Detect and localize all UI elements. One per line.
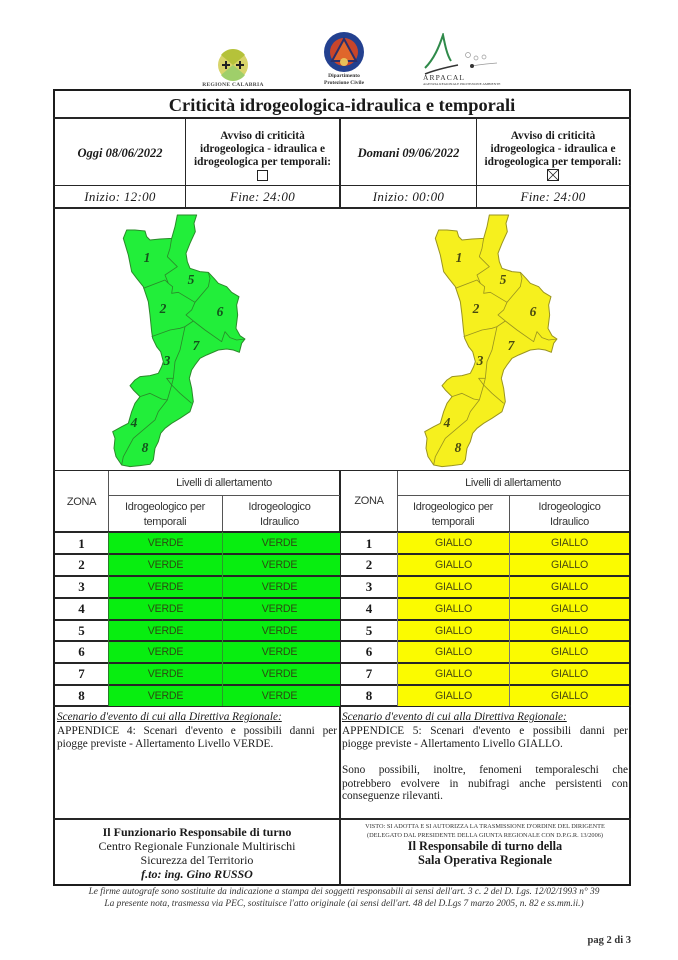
table: today alert levels: VERDE [148, 581, 183, 593]
tomorrow warning notice [484, 130, 622, 181]
table: today alert levels: ZONA [67, 496, 96, 508]
table: tomorrow alert levels: GIALLO [435, 668, 472, 680]
table: today alert levels: 7 [78, 666, 85, 681]
logo: ARPACAL [423, 33, 500, 86]
table: tomorrow alert levels: Idrogeologico per [413, 501, 493, 513]
table: tomorrow alert levels: GIALLO [551, 625, 588, 637]
table: today alert levels: VERDE [148, 603, 183, 615]
map: tomorrow zones, yellow: 8 [455, 440, 462, 455]
signature: operations room: (DELEGATO DAL PRESIDENTE DELLA GIUNTA REGIONALE CON D.P.G.R. 13/2006) [367, 832, 603, 838]
table: tomorrow alert levels: Livelli di allertamento [465, 477, 561, 489]
map: today zones, green: 2 [159, 301, 167, 316]
signature: duty officer: Sicurezza del Territorio [141, 853, 253, 867]
map: today zones, green: 3 [163, 353, 171, 368]
table: tomorrow alert levels [341, 471, 629, 706]
signature: duty officer [99, 825, 296, 881]
table: tomorrow alert levels: GIALLO [551, 646, 588, 658]
signature: duty officer: Centro Regionale Funzionale Multirischi [99, 839, 295, 853]
table: tomorrow alert levels: Idrogeologico [538, 501, 601, 513]
table: tomorrow alert levels: GIALLO [435, 537, 472, 549]
table: today alert levels: VERDE [262, 581, 297, 593]
today end time: Fine: 24:00 [230, 189, 295, 204]
table: tomorrow alert levels: GIALLO [435, 625, 472, 637]
table: today alert levels: VERDE [262, 625, 297, 637]
today warning notice: idrogeologica per temporali: [194, 156, 331, 168]
logo: ARPACAL: ARPACAL [423, 73, 465, 82]
table: tomorrow alert levels: GIALLO [551, 559, 588, 571]
table: today alert levels: VERDE [262, 537, 297, 549]
table: today alert levels: 6 [78, 644, 85, 659]
title: Criticità idrogeologica-idraulica e temporali [169, 95, 515, 115]
text block: tomorrow scenario: Sono possibili, inoltre, fenomeni temporaleschi che [342, 764, 628, 776]
today date: Oggi 08/06/2022 [77, 146, 163, 160]
table: today alert levels: 3 [78, 579, 85, 594]
legal footnote [88, 887, 600, 909]
table: tomorrow alert levels: GIALLO [435, 603, 472, 615]
tomorrow start time: Inizio: 00:00 [373, 189, 444, 204]
table: today alert levels: VERDE [148, 537, 183, 549]
text block: today scenario: Scenario d'evento di cui alla Direttiva Regionale: [57, 711, 282, 723]
table: today alert levels: VERDE [148, 559, 183, 571]
map: tomorrow zones, yellow: 3 [476, 353, 484, 368]
table: today alert levels: 1 [78, 536, 85, 551]
table: today alert levels: 8 [78, 688, 85, 703]
legal footnote: Le firme autografe sono sostituite da indicazione a stampa dei soggetti responsabili ai sensi dell'art. 3 c. 2 del D. Lgs. 12/02/1993 n° 39 [89, 887, 599, 897]
table: tomorrow alert levels: 7 [366, 666, 372, 681]
table: today alert levels: Idrogeologico per [125, 501, 205, 513]
signature: operations room: Il Responsabile di turno della [408, 839, 562, 853]
main form frame [53, 89, 631, 886]
text block: today scenario [57, 711, 337, 750]
tomorrow warning notice: idrogeologica - idraulica e [490, 143, 615, 155]
table: tomorrow alert levels: 6 [366, 644, 372, 659]
map: tomorrow zones, yellow: 4 [443, 415, 451, 430]
map: today zones, green: 8 [142, 440, 149, 455]
table: today alert levels: Livelli di allertamento [176, 477, 272, 489]
table: tomorrow alert levels: GIALLO [551, 537, 588, 549]
logo: Dipartimento Protezione Civile: Protezione Civile [324, 80, 364, 86]
today start time: Inizio: 12:00 [84, 189, 156, 204]
table: tomorrow alert levels: 1 [366, 536, 372, 551]
text block: tomorrow scenario: piogge previste - Allertamento Livello GIALLO. [342, 738, 563, 750]
table: tomorrow alert levels: GIALLO [551, 603, 588, 615]
table: today alert levels: VERDE [148, 668, 183, 680]
table: tomorrow alert levels: 4 [366, 601, 372, 616]
today warning notice: Avviso di criticità [220, 130, 305, 142]
table: today alert levels: 4 [78, 601, 85, 616]
table: tomorrow alert levels: 3 [366, 579, 372, 594]
table: tomorrow alert levels: ZONA [354, 495, 384, 507]
table: tomorrow alert levels: Idraulico [550, 516, 589, 528]
text block: today scenario: APPENDICE 4: Scenari d'evento e possibili danni per [57, 725, 337, 737]
text block: tomorrow scenario: conseguenze rilevanti. [342, 790, 443, 802]
text block: tomorrow scenario: potrebbero evolvere in nubifragi anche persistenti con [342, 778, 628, 790]
table: tomorrow alert levels: GIALLO [551, 581, 588, 593]
table: today alert levels: VERDE [262, 690, 297, 702]
today warning notice [194, 130, 331, 181]
table: tomorrow alert levels: GIALLO [435, 581, 472, 593]
logo: ARPACAL: AGENZIA REGIONALE PROTEZIONE AMBIENTE [423, 82, 500, 86]
text block: tomorrow scenario: Scenario d'evento di cui alla Direttiva Regionale: [342, 711, 567, 723]
map: tomorrow zones, yellow: 1 [456, 250, 462, 265]
signature: duty officer: f.to: ing. Gino RUSSO [141, 867, 253, 881]
table: today alert levels: VERDE [262, 603, 297, 615]
table: today alert levels: VERDE [262, 646, 297, 658]
signature: operations room: VISTO: SI ADOTTA E SI AUTORIZZA LA TRASMISSIONE D'ORDINE DEL DIRIGENTE [365, 823, 605, 830]
signature: duty officer: Il Funzionario Responsabile di turno [103, 825, 291, 839]
text block: tomorrow scenario: APPENDICE 5: Scenari d'evento e possibili danni per [342, 725, 628, 737]
table: today alert levels: 5 [78, 623, 85, 638]
map: today zones, green: 4 [130, 415, 138, 430]
table: today alert levels: Idraulico [260, 516, 299, 528]
map: tomorrow zones, yellow: 6 [530, 304, 537, 319]
legal footnote: La presente nota, trasmessa via PEC, sostituisce l'atto originale (ai sensi dell'art. 48 del D.Lgs 7 marzo 2005, n. 82 e ss.mm.ii.) [104, 899, 584, 909]
today warning notice: idrogeologica - idraulica e [200, 143, 325, 155]
logo: Dipartimento Protezione Civile [324, 32, 364, 86]
map: today zones, green: 7 [193, 338, 201, 353]
table: tomorrow alert levels: temporali [432, 516, 474, 528]
map: tomorrow zones, yellow: 5 [500, 272, 507, 287]
table: today alert levels [55, 471, 340, 706]
table: tomorrow alert levels: GIALLO [435, 559, 472, 571]
text block: today scenario: piogge previste - Allertamento Livello VERDE. [57, 738, 273, 750]
map: today zones, green: 6 [217, 304, 224, 319]
map: tomorrow zones, yellow: 2 [472, 301, 480, 316]
map: today zones, green: 1 [144, 250, 150, 265]
table: tomorrow alert levels: 5 [366, 623, 372, 638]
logo: Regione Calabria: REGIONE CALABRIA [202, 82, 264, 88]
map: today zones, green: 5 [188, 272, 195, 287]
table: tomorrow alert levels: 2 [366, 557, 372, 572]
tomorrow end time: Fine: 24:00 [520, 189, 586, 204]
table: today alert levels: VERDE [148, 625, 183, 637]
table: tomorrow alert levels: GIALLO [435, 690, 472, 702]
tomorrow warning notice: Avviso di criticità [511, 130, 595, 142]
table: today alert levels: VERDE [148, 690, 183, 702]
tomorrow date: Domani 09/06/2022 [358, 146, 459, 160]
signature: operations room [365, 823, 605, 867]
table: tomorrow alert levels: GIALLO [435, 646, 472, 658]
text block: tomorrow scenario [342, 711, 628, 802]
page number: pag 2 di 3 [588, 935, 631, 946]
table: today alert levels: VERDE [262, 559, 297, 571]
table: today alert levels: temporali [144, 516, 186, 528]
table: tomorrow alert levels: GIALLO [551, 690, 588, 702]
tomorrow warning notice: idrogeologica per temporali: [484, 156, 622, 168]
table: today alert levels: Idrogeologico [248, 501, 311, 513]
table: today alert levels: 2 [78, 557, 85, 572]
logo: Dipartimento Protezione Civile: Dipartimento [328, 73, 360, 79]
map: tomorrow zones, yellow: 7 [508, 338, 516, 353]
table: tomorrow alert levels: GIALLO [551, 668, 588, 680]
table: today alert levels: VERDE [148, 646, 183, 658]
logo: Regione Calabria [202, 49, 264, 88]
signature: operations room: Sala Operativa Regionale [418, 853, 552, 867]
table: tomorrow alert levels: 8 [366, 688, 372, 703]
table: today alert levels: VERDE [262, 668, 297, 680]
